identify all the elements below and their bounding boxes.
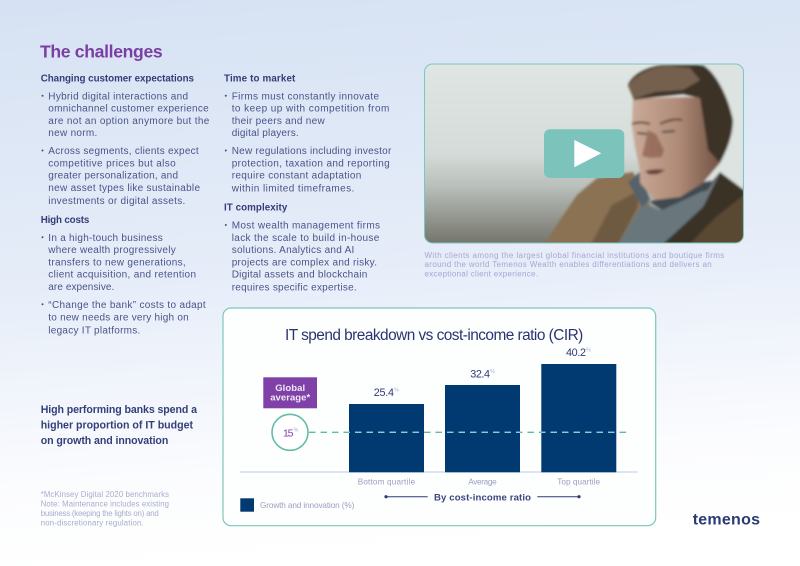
bullet: new regulations: require constant adaptation: [232, 171, 361, 182]
footnote: [41, 490, 169, 528]
bar: average: [445, 368, 520, 487]
bullet: wealth management firms: projects are complex and risky.: [232, 257, 377, 268]
callout text: high performing banks: High performing banks spend a: [41, 404, 197, 416]
bullet: firms must innovate: digital players.: [232, 128, 299, 139]
bar: bottom quartile: 25.4: [374, 387, 394, 399]
photo: man being interviewed: [545, 64, 744, 244]
circle: 15 percent: %: [294, 428, 298, 434]
bullet: hybrid digital interactions: Hybrid digital interactions and: [48, 91, 188, 102]
x axis: [240, 471, 638, 473]
heading: time to market: Time to market: [224, 74, 296, 84]
footnote: business (keeping the lights on) and: [41, 509, 159, 518]
bar: bottom quartile: Bottom quartile: [358, 478, 415, 487]
bullet: firms must innovate: [225, 91, 389, 139]
bullet: wealth management firms: solutions. Analytics and AI: [232, 245, 354, 256]
axis annotation: by cost-income ratio: [384, 492, 581, 503]
logo: temenos: temenos: [693, 511, 760, 528]
callout: global average: Global: [275, 383, 305, 394]
legend: [240, 498, 355, 512]
bullet: wealth management firms: [225, 220, 380, 294]
bar: average: 32.4: [470, 368, 490, 380]
bullet: wealth management firms: requires specific expertise.: [232, 283, 357, 294]
bullet: across segments: competitive prices but also: [48, 158, 176, 169]
heading: high costs: High costs: [41, 215, 90, 226]
title: The challenges: [40, 42, 163, 62]
callout text: high performing banks: higher proportion of IT budget: [41, 420, 193, 432]
callout: global average: average*: [270, 392, 310, 404]
bullet: high-touch business: are expensive.: [48, 282, 114, 293]
text column: customer expectations and high costs: [41, 74, 210, 336]
bullet: high-touch business: client acquisition, and retention: [48, 270, 196, 281]
bullet: hybrid digital interactions: new norm.: [48, 128, 97, 139]
heading: IT complexity: IT complexity: [224, 202, 288, 214]
footnote: *McKinsey Digital 2020 benchmarks: [41, 490, 169, 499]
bullet: change the bank: legacy IT platforms.: [48, 326, 140, 336]
bullet: high-touch business: In a high-touch business: [48, 233, 163, 244]
bullet: across segments: greater personalization, and: [48, 171, 178, 182]
axis annotation: by cost-income ratio: By cost-income ratio: [434, 492, 531, 503]
legend: Growth and innovation (%): [260, 501, 355, 510]
bullet: change the bank: [42, 300, 206, 336]
bullet: new regulations: protection, taxation and reporting: [232, 158, 390, 169]
heading: changing customer expectations: Changing customer expectations: [41, 74, 195, 84]
bullet: new regulations: within limited timeframes.: [231, 183, 354, 194]
bullet: firms must innovate: Firms must constantly innovate: [232, 91, 379, 102]
video caption: exceptional client experience.: [424, 269, 538, 278]
callout: global average: [263, 377, 317, 408]
bullet: change the bank: “Change the bank” costs to adapt: [48, 300, 206, 311]
bullet: high-touch business: transfers to new generations,: [48, 257, 186, 268]
bullet: across segments: [42, 146, 200, 207]
bullet: hybrid digital interactions: are not an option anymore but the: [48, 116, 210, 127]
bullet: wealth management firms: Most wealth management firms: [232, 220, 380, 232]
photo background: [424, 64, 744, 244]
bullet: across segments: new asset types like sustainable: [48, 183, 200, 194]
chart title: IT spend breakdown vs cost-income ratio (CIR): [285, 327, 583, 344]
bullet: new regulations: [225, 146, 392, 194]
bullet: high-touch business: [42, 233, 196, 293]
bar: top quartile: [541, 347, 616, 487]
bullet: hybrid digital interactions: omnichannel customer experience: [48, 104, 209, 115]
footnote: Note: Maintenance includes existing: [41, 499, 169, 508]
bullet: wealth management firms: Digital assets and blockchain: [232, 270, 367, 281]
bullet: across segments: investments or digital assets.: [48, 196, 185, 207]
video caption: [424, 251, 724, 278]
video caption: around the world Temenos Wealth enables differentiations and delivers an: [424, 260, 712, 269]
text column: time to market and IT complexity: [224, 74, 392, 294]
bar: bottom quartile: %: [394, 388, 399, 394]
callout text: high performing banks: [41, 404, 197, 447]
bullet: wealth management firms: lack the scale to build in-house: [232, 233, 380, 244]
bar: average: %: [490, 369, 495, 375]
bar: bottom quartile: [349, 387, 424, 487]
bullet: firms must innovate: to keep up with competition from: [232, 104, 389, 115]
bar: top quartile: %: [586, 348, 591, 354]
video caption: With clients among the largest global financial institutions and boutique firms: [424, 251, 724, 260]
bar: top quartile: 40.2: [566, 347, 586, 359]
bullet: change the bank: to new needs are very high on: [48, 312, 189, 323]
bullet: new regulations: New regulations including investor: [232, 146, 392, 157]
bullet: high-touch business: where wealth progressively: [47, 245, 176, 256]
dashed line: global average: [309, 432, 626, 433]
bar: average: Average: [468, 478, 497, 487]
bar: top quartile: Top quartile: [557, 478, 600, 487]
bullet: hybrid digital interactions: [42, 91, 210, 139]
bullet: firms must innovate: their peers and new: [232, 116, 325, 127]
callout text: high performing banks: on growth and innovation: [41, 435, 168, 447]
footnote: non-discretionary regulation.: [41, 518, 144, 528]
circle: 15 percent: 15: [283, 427, 294, 439]
bullet: across segments: Across segments, clients expect: [48, 146, 199, 157]
chart panel: [223, 308, 656, 526]
video panel: [424, 64, 744, 244]
circle: 15 percent: [272, 414, 308, 450]
play button: [544, 129, 624, 178]
